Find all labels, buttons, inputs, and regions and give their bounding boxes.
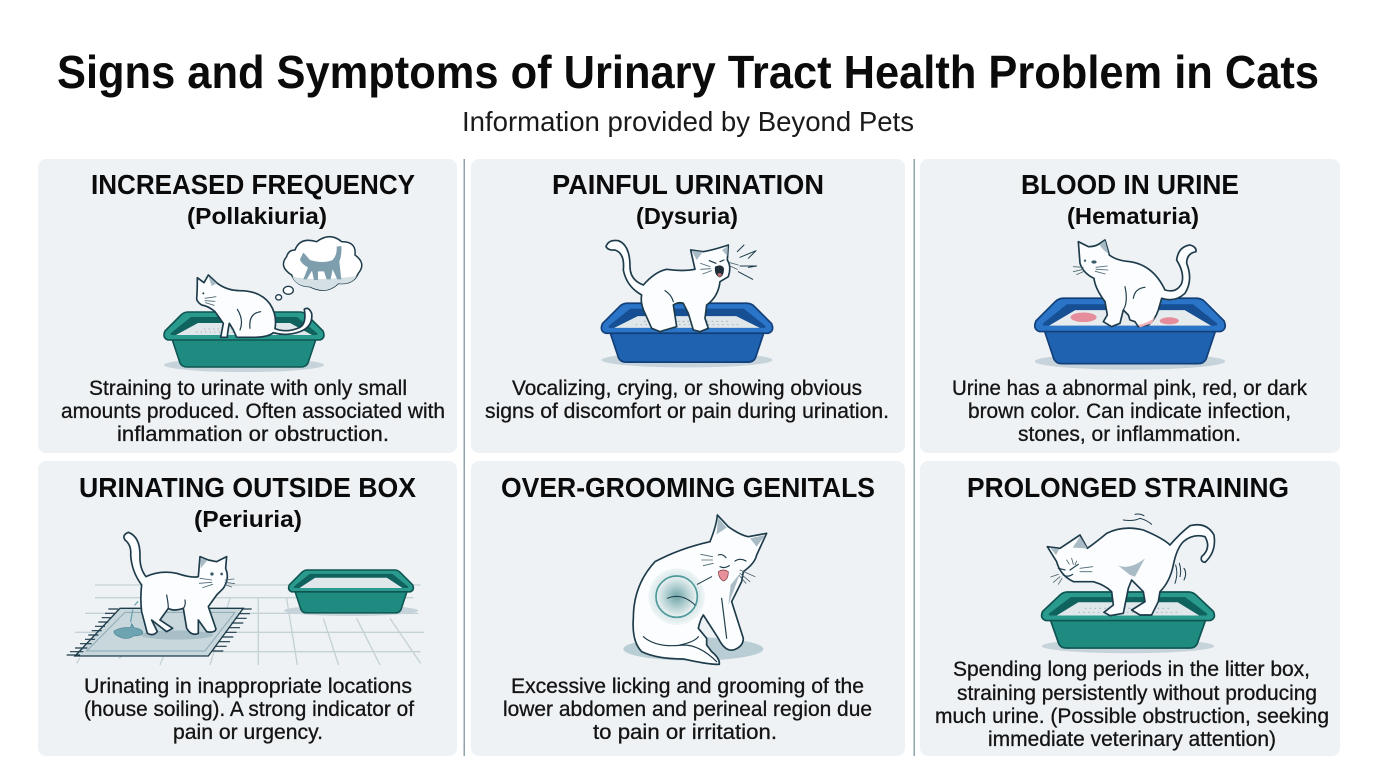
body text: lower abdomen and perineal region due [503, 698, 872, 721]
body text: stones, or inflammation. [1018, 423, 1241, 446]
body text: straining persistently without producing [957, 682, 1317, 705]
body text: much urine. (Possible obstruction, seeking [935, 705, 1329, 728]
body text: (house soiling). A strong indicator of [84, 698, 414, 721]
body text [935, 658, 1329, 751]
icon: rug [67, 608, 252, 656]
heading: blood in urine: BLOOD IN URINE [1021, 169, 1239, 200]
heading: increased frequency: INCREASED FREQUENCY [91, 169, 415, 200]
heading: painful urination: PAINFUL URINATION [552, 169, 824, 200]
body text: signs of discomfort or pain during urination. [485, 400, 889, 423]
body text: Urinating in inappropriate locations [84, 675, 412, 698]
body text: amounts produced. Often associated with [61, 400, 445, 423]
body text: Excessive licking and grooming of the [511, 675, 864, 698]
body text: Urine has a abnormal pink, red, or dark [952, 377, 1307, 400]
subtitle: Information provided by Beyond Pets [462, 106, 914, 137]
icon: puddle [114, 624, 143, 638]
panel: blood in urine [920, 159, 1340, 453]
icon: cat straining in box [197, 237, 362, 337]
title: Signs and Symptoms of Urinary Tract Health Problem in Cats [57, 46, 1319, 98]
icon: teal litter box [164, 312, 324, 372]
icon: standing cat [124, 532, 227, 635]
icon: blue litter box [601, 303, 773, 367]
icon: crying cat in box [606, 240, 757, 332]
panel: prolonged straining [920, 461, 1340, 756]
panel: painful urination [471, 159, 905, 453]
body text: immediate veterinary attention) [988, 728, 1276, 751]
illustration: floor, rug, cat and box [67, 532, 424, 665]
body text: Spending long periods in the litter box, [953, 658, 1310, 681]
panel: increased frequency [38, 159, 457, 453]
body text [84, 675, 414, 744]
panel: over-grooming genitals [471, 461, 905, 756]
icon: blue litter box with blood spots [1035, 298, 1225, 370]
icon: teal litter box [284, 570, 418, 616]
body text [61, 377, 445, 446]
icon: thought bubble [276, 237, 362, 300]
heading: urinating outside box: URINATING OUTSIDE BOX [79, 472, 417, 503]
subheading: periuria: (Periuria) [194, 506, 302, 532]
icon: teal litter box [1042, 592, 1214, 653]
body text: Straining to urinate with only small [89, 377, 407, 400]
subheading: pollakiuria: (Pollakiuria) [187, 203, 327, 229]
body text: inflammation or obstruction. [117, 423, 389, 446]
body text: Vocalizing, crying, or showing obvious [512, 377, 862, 400]
subheading: hematuria: (Hematuria) [1067, 203, 1199, 229]
icon: cat in box [1073, 240, 1196, 327]
heading: over-grooming genitals: OVER-GROOMING GENITALS [501, 472, 875, 503]
body text: brown color. Can indicate infection, [968, 400, 1291, 423]
body text: to pain or irritation. [593, 721, 777, 744]
panel: urinating outside box [38, 461, 457, 756]
heading: prolonged straining: PROLONGED STRAINING [967, 472, 1289, 503]
body text [952, 377, 1307, 446]
body text: pain or urgency. [173, 721, 323, 744]
icon: cat licking itself [623, 515, 767, 664]
subheading: dysuria: (Dysuria) [636, 203, 738, 229]
body text [503, 675, 872, 744]
body text [485, 377, 889, 423]
icon: hunched cat straining [1047, 514, 1214, 616]
